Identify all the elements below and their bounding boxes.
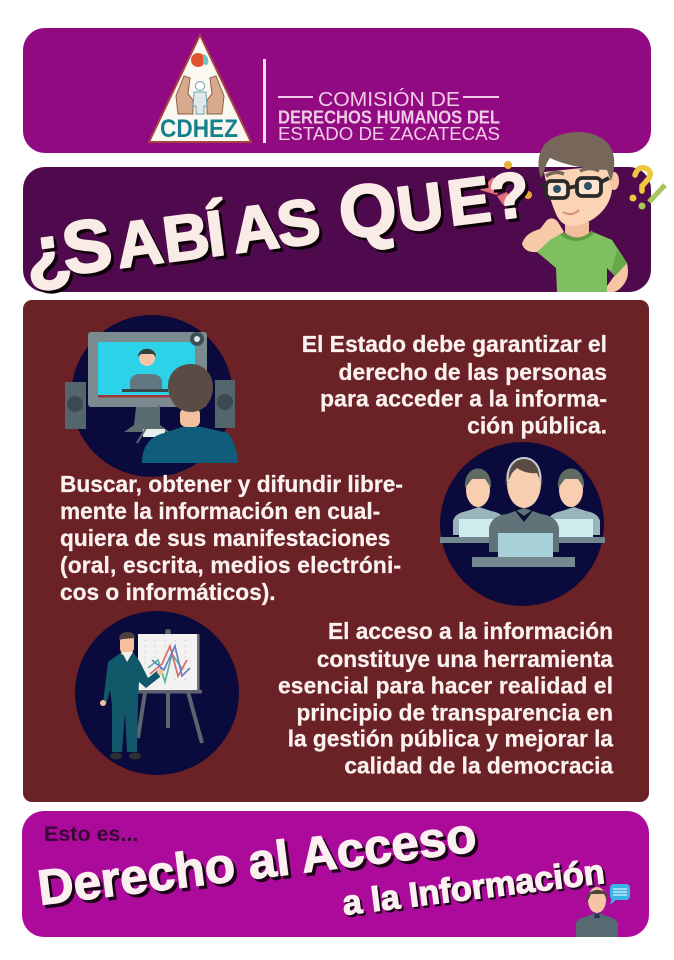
hair [539,132,614,181]
title: ? [486,158,534,234]
face [544,165,612,226]
title: S [57,202,117,291]
title shadow: S [60,205,120,294]
text block 3: la gestión pública y mejorar la [288,726,613,752]
text block 2: mente la información en cual- [60,498,380,524]
right forearm [596,263,628,292]
organisation name: COMISIÓN DE [318,88,460,111]
logo: CDHEZ [149,35,251,143]
text block 1: El Estado debe garantizar el [302,331,607,357]
title shadow [22,152,537,298]
text block 2: (oral, escrita, medios electróni- [60,552,401,578]
panel: closing banner [22,808,649,937]
icon: question and exclamation marks [630,168,665,210]
text block 2: cos o informáticos). [60,579,276,605]
shirt [537,232,627,292]
title [19,149,534,295]
closing heading: Derecho al Acceso [35,808,479,916]
icon: video monitor with viewer [65,315,238,477]
neck [565,222,589,238]
text block 2: Buscar, obtener y difundir libre- [60,471,403,497]
text block 1: derecho de las personas [339,359,607,385]
title: Í [202,196,231,270]
logo wordmark: CDHEZ [160,115,238,143]
icon: agent with speech bubble [576,884,630,937]
illustration: thinking man [522,132,628,292]
text block 3: esencial para hacer realidad el [278,672,613,698]
icon: presenter with chart [75,611,239,775]
closing heading: a la Información [340,853,607,923]
text block 2 [60,471,403,605]
centre operator [489,508,559,552]
text block 2: quiera de sus manifestaciones [60,525,390,551]
lead-in text: Esto es... [44,822,138,846]
text block 3: El acceso a la información [328,618,613,644]
title: U [393,169,448,246]
title shadow: ¿ [22,210,78,298]
organisation name: DERECHOS HUMANOS DEL [278,108,500,128]
text block 3: principio de transparencia en [297,700,613,726]
title: S [273,184,324,261]
side operators [453,507,505,535]
forearm and hand [522,218,564,252]
panel: main content [23,300,649,802]
closing heading shadow: a la Información [342,855,609,925]
title shadow: ? [489,161,537,237]
title: ¿ [19,207,75,295]
text block 3: constituye una herramienta [317,646,613,672]
text block 1 [302,331,607,438]
title shadow: U [396,172,451,249]
title: E [443,163,495,239]
decorative shapes behind the question mark [480,161,532,205]
title shadow: A [115,208,170,285]
text block 1: ción pública. [467,412,607,438]
panel: title banner [19,149,651,298]
title shadow: A [231,193,286,270]
icon: three operators at laptops [440,442,605,606]
title: A [112,205,167,282]
glasses [541,178,609,198]
title shadow: Í [205,199,234,273]
panel: header [23,28,651,153]
title shadow: Q [337,169,405,258]
text block 3 [278,618,613,778]
title: A [228,190,283,267]
title shadow: B [161,202,216,279]
text block 3: calidad de la democracia [344,752,613,778]
text block 1: para acceder a la informa- [320,386,607,412]
title shadow: S [276,187,327,264]
title shadow: E [446,166,498,242]
title: B [158,199,213,276]
closing heading shadow: Derecho al Acceso [38,811,482,919]
easel [138,692,202,743]
title: Q [334,166,402,255]
organisation name [278,88,500,144]
organisation name: ESTADO DE ZACATECAS [278,124,500,144]
presenter [103,652,160,752]
